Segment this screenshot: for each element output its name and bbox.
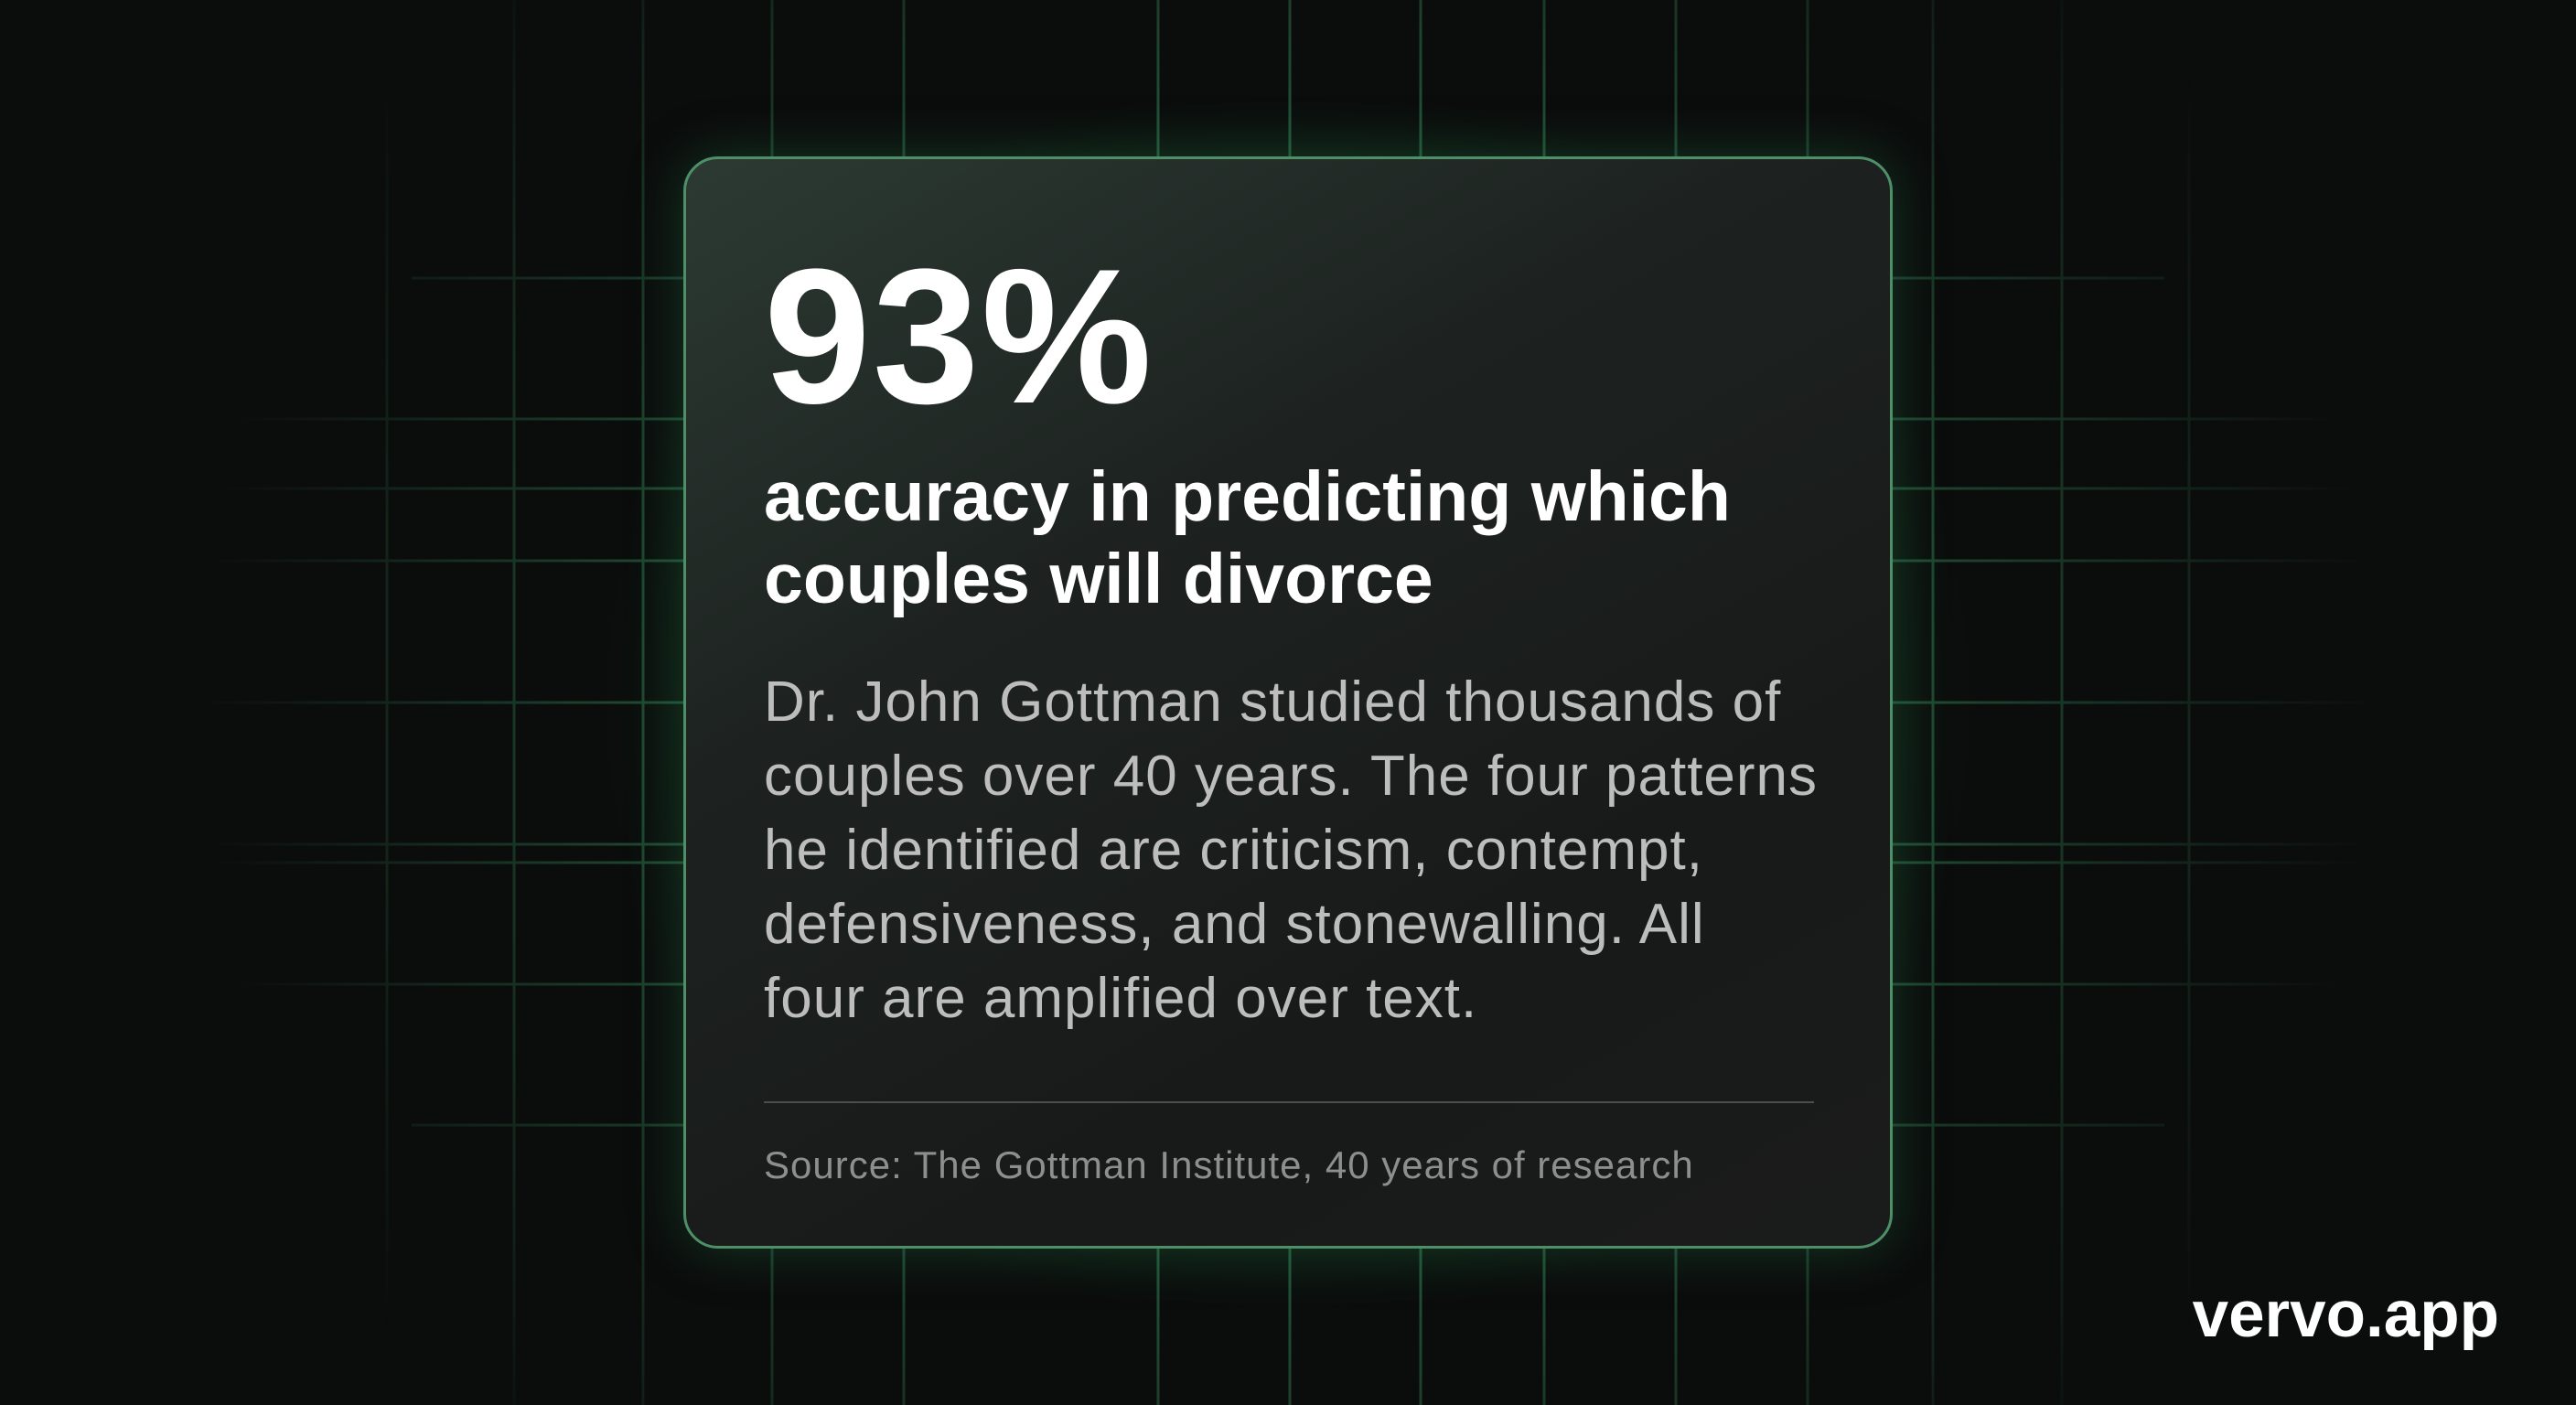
panel: stat card — [683, 156, 1893, 1249]
body text: four are amplified over text. — [764, 967, 1477, 1030]
subheading: accuracy in predicting which — [764, 457, 1731, 536]
subheading: couples will divorce — [764, 540, 1433, 618]
body text: he identified are criticism, contempt, — [764, 819, 1703, 882]
body text — [764, 670, 1818, 1030]
body text: defensiveness, and stonewalling. All — [764, 893, 1705, 956]
subheading — [764, 457, 1731, 618]
headline stat 93%: 93% — [764, 229, 1154, 444]
brand: vervo.app: vervo.app — [2193, 1279, 2499, 1351]
body text: couples over 40 years. The four patterns — [764, 745, 1818, 808]
body text: Dr. John Gottman studied thousands of — [764, 670, 1781, 734]
source note: Source: The Gottman Institute, 40 years of research — [764, 1143, 1694, 1186]
